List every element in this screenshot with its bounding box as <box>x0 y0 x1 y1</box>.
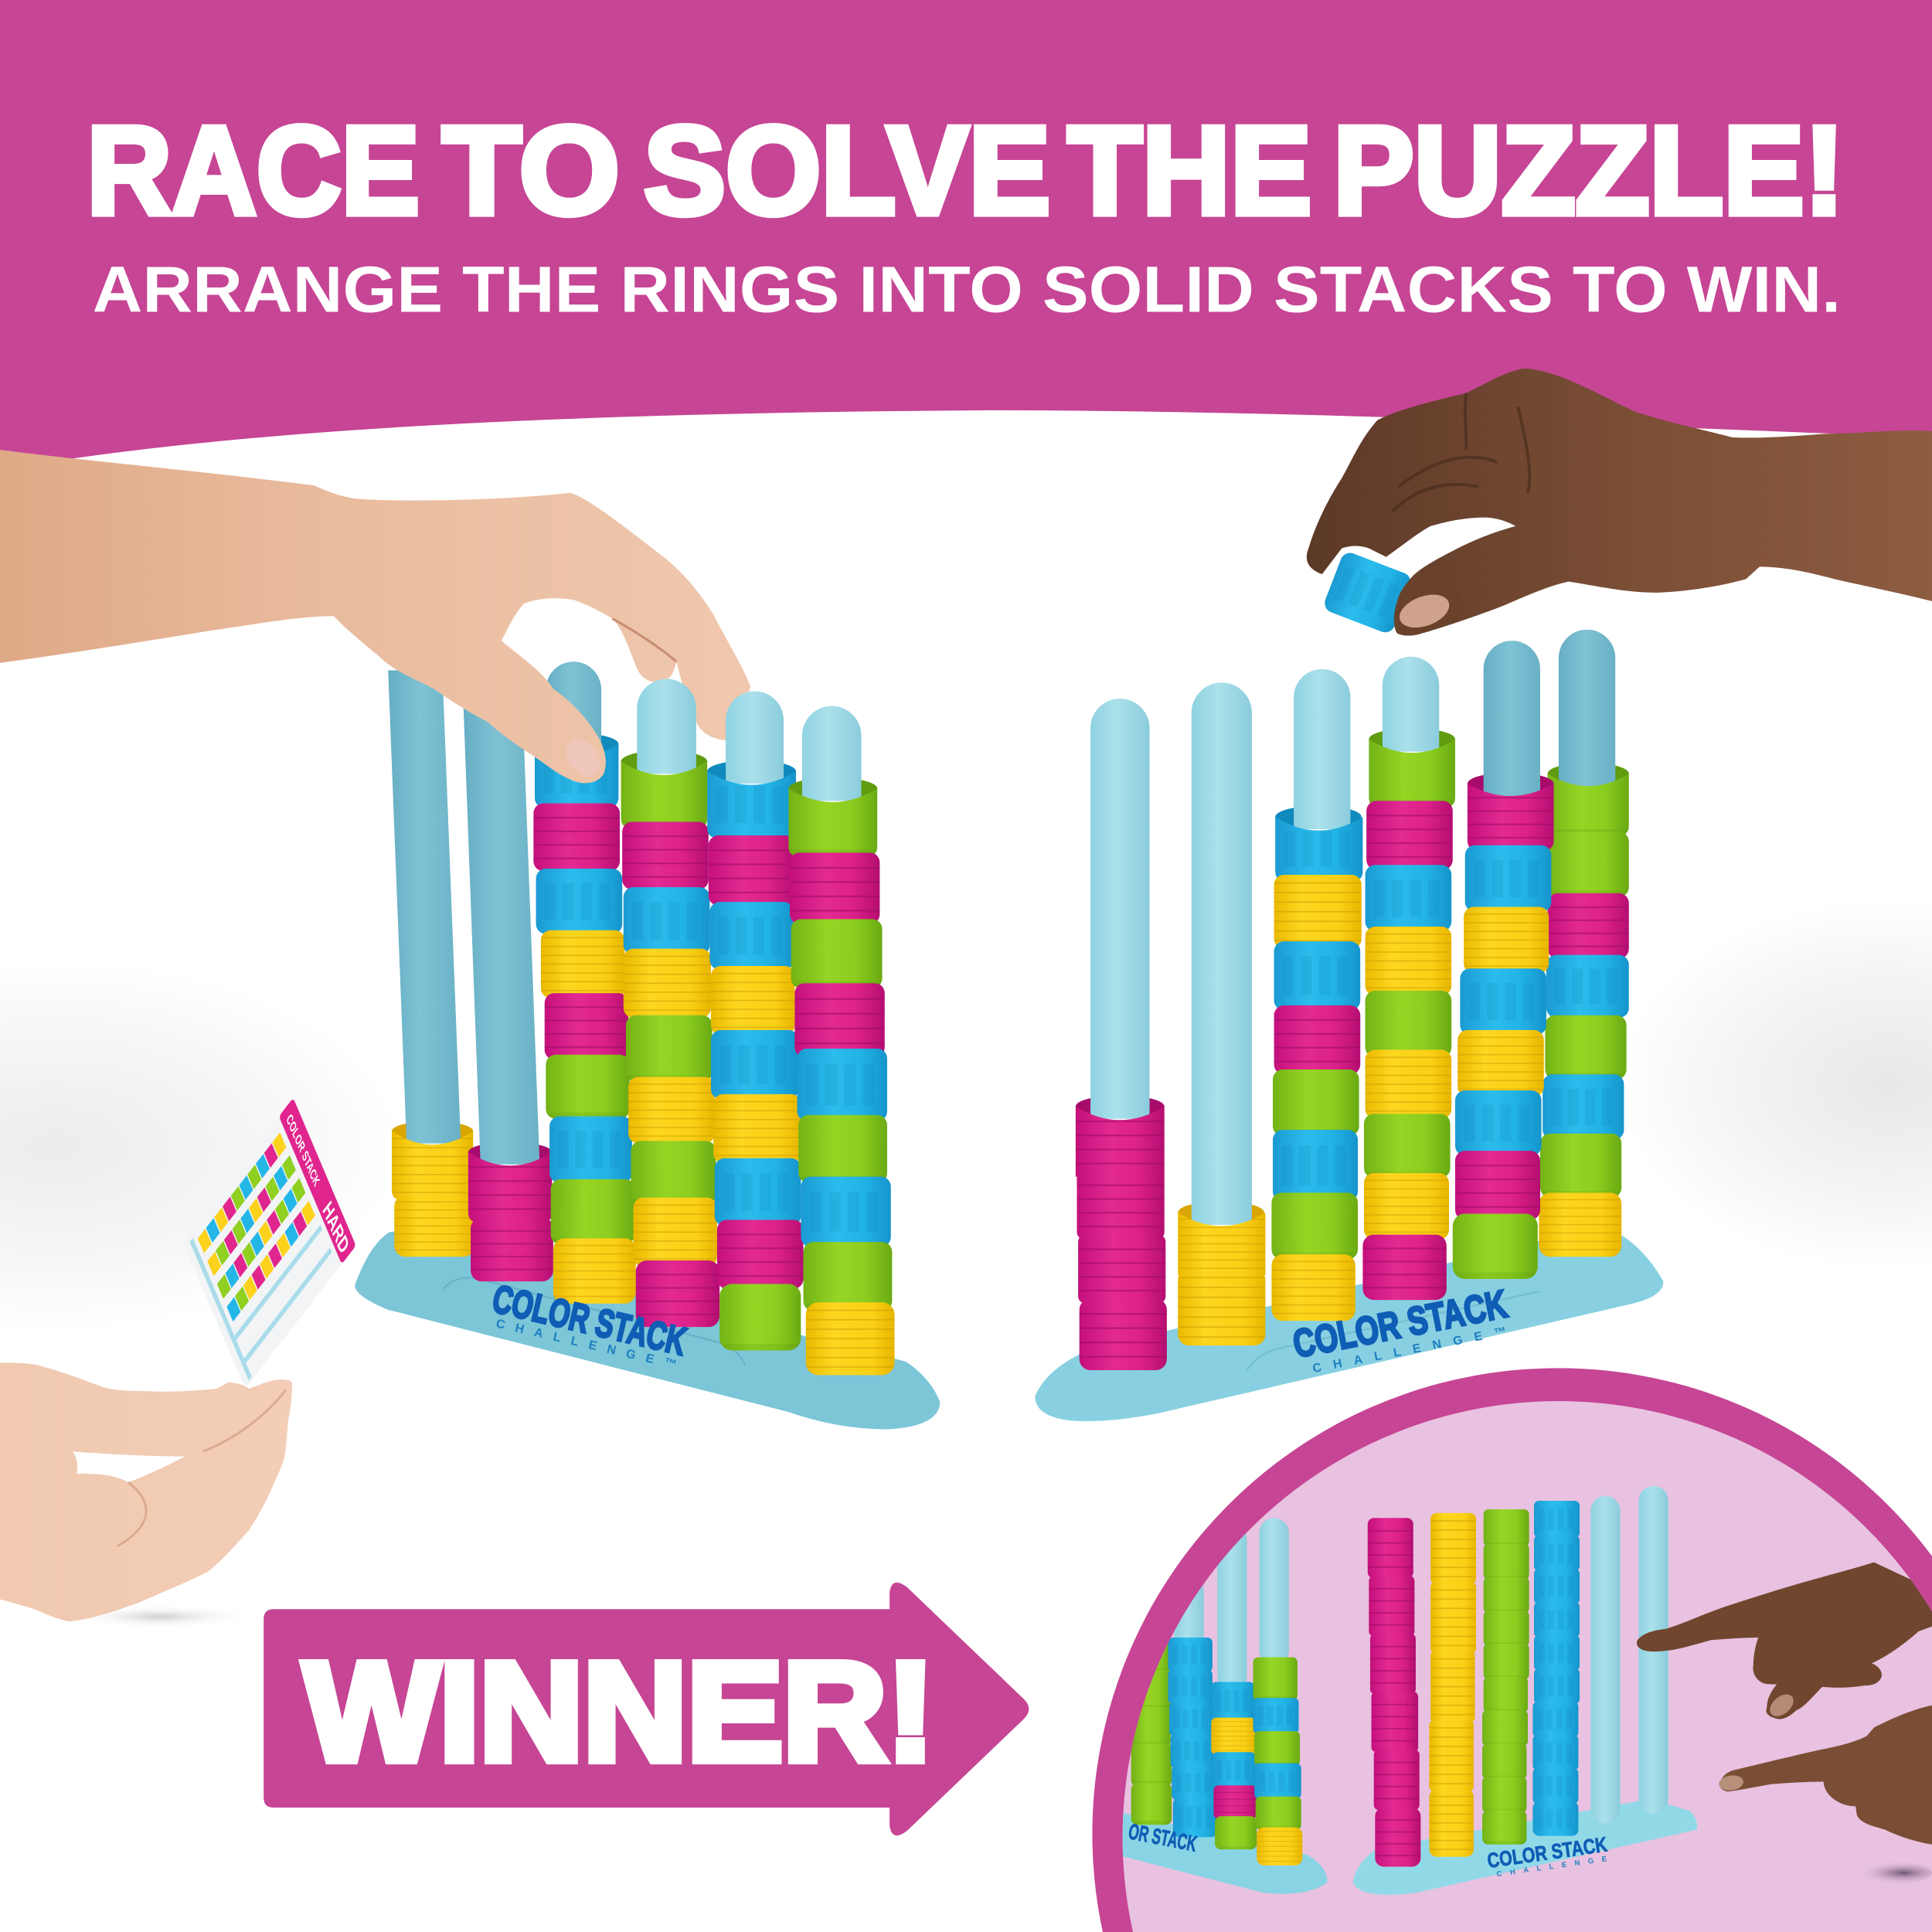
thumb nail <box>1395 588 1454 634</box>
left toy column 6 <box>788 706 895 1375</box>
card header strip <box>279 1098 356 1264</box>
left toy magenta rings <box>463 702 553 1281</box>
inset ring <box>1092 1368 1932 1932</box>
title: TO <box>442 101 620 241</box>
inset left base <box>1115 1811 1327 1894</box>
inset green stack <box>1131 1633 1172 1825</box>
title: THE <box>1068 101 1311 241</box>
right toy base <box>1035 1226 1663 1421</box>
inset front stack <box>1253 1657 1302 1866</box>
card answer lines <box>190 1127 338 1380</box>
inset right toy <box>1353 1486 1697 1895</box>
left toy column 4 <box>621 679 719 1327</box>
title: PUZZLE! <box>1333 101 1845 241</box>
right table shadow <box>1393 900 1932 1269</box>
lower left hand <box>0 1362 292 1621</box>
right toy magenta rings <box>1076 699 1167 1370</box>
right toy column 6 <box>1539 630 1629 1257</box>
right toy column 4 <box>1362 657 1455 1300</box>
inset upper thumbnail <box>1766 1690 1798 1720</box>
inset green column <box>1482 1509 1529 1845</box>
left toy yellow rings <box>388 670 474 1257</box>
right toy <box>1035 630 1663 1421</box>
right hand with ring <box>1307 369 1932 636</box>
left toy <box>0 450 940 1429</box>
right toy logo: CHALLENGE™ <box>1311 1325 1508 1376</box>
left toy logo: CHALLENGE™ <box>495 1317 678 1372</box>
index fingernail <box>559 732 607 784</box>
title: RACE <box>87 101 420 241</box>
inset upper pointing hand <box>1637 1563 1932 1719</box>
inset yellow column <box>1429 1513 1476 1857</box>
right toy base panel edge <box>1247 1291 1540 1370</box>
inset lower pointing hand <box>1719 1706 1932 1845</box>
puzzle card: COLOR STACK <box>284 1111 321 1190</box>
left toy logo: COLOR STACK <box>488 1277 691 1364</box>
inset lower fingernail <box>1718 1774 1744 1792</box>
thumb tip <box>1394 560 1466 636</box>
inset right logo: COLOR STACK <box>1486 1832 1609 1872</box>
thumb crease <box>117 1389 286 1546</box>
left toy base <box>355 1232 940 1429</box>
right toy yellow rings <box>1178 682 1265 1345</box>
right toy logo <box>1290 1281 1511 1376</box>
held blue ring <box>1322 550 1413 635</box>
inset mixed stack <box>1211 1682 1257 1849</box>
title <box>87 101 1845 241</box>
right toy column 5 <box>1453 641 1554 1279</box>
inset left toy <box>1115 1518 1327 1894</box>
inset background <box>1123 1401 1932 1932</box>
inset right logo: CHALLENGE <box>1496 1855 1607 1879</box>
card colour grid <box>198 1133 315 1321</box>
dark hand <box>1307 369 1932 636</box>
winner label: WINNER! <box>304 1633 934 1791</box>
subtitle: ARRANGE THE RINGS INTO SOLID STACKS TO WIN. <box>93 253 1841 325</box>
left table shadow <box>0 961 690 1331</box>
puzzle card <box>182 1098 356 1389</box>
inset photo <box>1115 1486 1932 1895</box>
winner arrow <box>264 1583 1029 1835</box>
inset right pegs <box>1590 1486 1668 1824</box>
lower hand shadow <box>68 1604 253 1629</box>
left hand with card <box>0 1098 356 1621</box>
inset blue column <box>1532 1501 1580 1836</box>
right toy column 3 <box>1271 669 1362 1321</box>
left hand <box>0 450 750 784</box>
left toy column 5 <box>707 691 804 1350</box>
inset pegs <box>1174 1518 1289 1692</box>
inset right base <box>1353 1799 1697 1895</box>
inset hand shadow <box>1869 1864 1932 1883</box>
left toy base panel edge <box>444 1277 746 1366</box>
inset circle <box>1092 1368 1932 1932</box>
puzzle card: HARD <box>319 1196 352 1259</box>
right toy logo: COLOR STACK <box>1290 1281 1511 1366</box>
finger creases <box>1393 393 1529 512</box>
left toy logo <box>488 1277 691 1372</box>
inset right logo <box>1486 1832 1609 1879</box>
title: SOLVE <box>644 101 1050 241</box>
inset magenta column <box>1368 1518 1420 1866</box>
inset left logo: OR STACK <box>1127 1819 1199 1857</box>
gap between thumb and fingers <box>73 1451 185 1482</box>
inset blue stack <box>1168 1638 1217 1837</box>
left toy column 3 <box>533 662 636 1304</box>
header banner <box>0 0 1932 474</box>
finger crease <box>612 618 676 662</box>
